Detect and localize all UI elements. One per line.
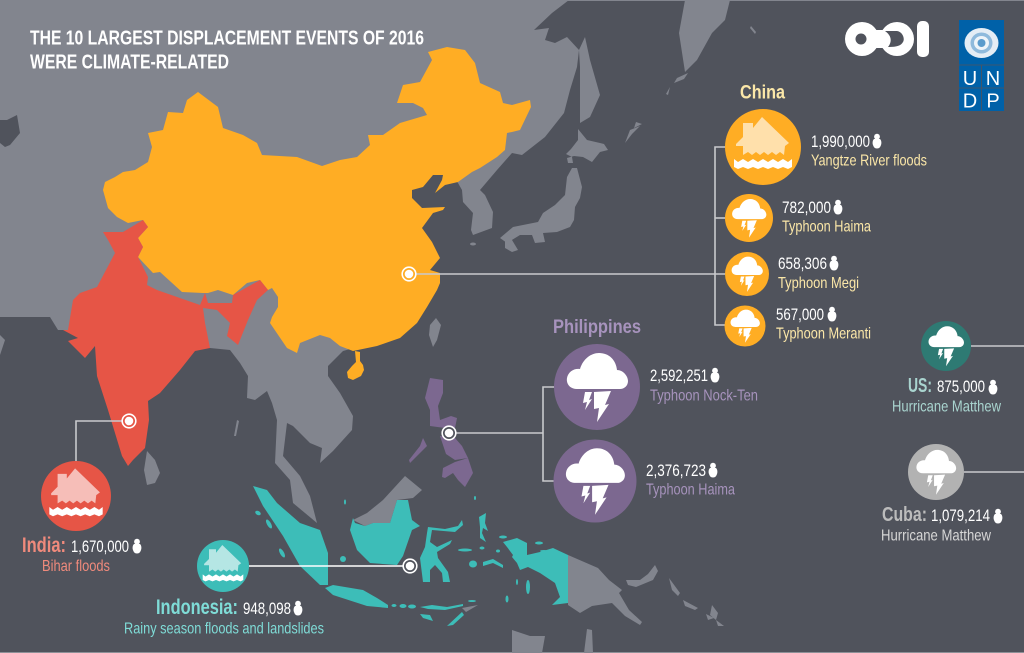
map: India — [63, 220, 268, 466]
icon: flood — [725, 109, 801, 185]
Sulawesi — [420, 520, 463, 582]
Kamchatka — [679, 0, 730, 72]
text: US — [892, 375, 1001, 416]
map: Indonesia — [253, 486, 568, 626]
panel: India — [22, 461, 141, 575]
text: Meranti: Typhoon Meranti — [776, 326, 871, 342]
marker: Philippines — [442, 426, 456, 440]
panel: Indonesia — [124, 540, 324, 638]
text: Indonesia: Indonesia: — [156, 596, 238, 619]
panel: Philippines — [553, 316, 758, 522]
logo: ODI — [845, 21, 929, 57]
text: India: Bihar floods — [42, 558, 110, 575]
text: Nock-Ten: 2,592,251 — [650, 367, 708, 385]
logo: UNDP: U — [963, 68, 977, 90]
Sakhalin — [579, 37, 600, 123]
Timor east — [462, 605, 478, 612]
text: Megi: 658,306 — [778, 255, 827, 273]
text: Nock-Ten — [650, 367, 758, 404]
logo: UNDP: D — [963, 90, 977, 112]
Australia — [584, 629, 593, 653]
icon: storm — [908, 444, 964, 500]
text: US: 875,000 — [937, 378, 985, 396]
text: India — [22, 534, 141, 575]
text: Meranti — [776, 306, 871, 342]
Taiwan — [429, 318, 441, 347]
icon: storm Haima — [554, 440, 636, 522]
marker: India — [122, 414, 136, 428]
panel: China — [724, 82, 927, 346]
text: US: US: — [908, 375, 932, 397]
marker: Indonesia — [403, 559, 417, 573]
Papua — [503, 538, 568, 605]
Hokkaido — [566, 129, 608, 163]
connector lines — [76, 147, 1024, 566]
text: Haima: 2,376,723 — [646, 462, 706, 480]
icon: flood — [41, 461, 111, 531]
logo: UNDP: N — [986, 68, 1000, 90]
marker: China — [402, 267, 416, 281]
text: Haima: 782,000 — [782, 199, 831, 217]
panel: US — [892, 321, 1001, 416]
text: US: Hurricane Matthew — [892, 398, 1001, 416]
icon: storm Haima — [725, 194, 773, 242]
Kyushu — [505, 240, 518, 252]
logo: UNDP: P — [986, 90, 1000, 112]
panel: Cuba — [881, 444, 1002, 544]
logo: UNDP — [959, 20, 1004, 112]
text: Haima — [646, 462, 735, 498]
text: Megi: Typhoon Megi — [778, 275, 859, 292]
text: Haima: Typhoon Haima — [646, 482, 735, 498]
text: Indonesia: Rainy season floods and landslides — [124, 620, 324, 638]
text: Cuba: Cuba: — [882, 504, 927, 526]
text: Indonesia: 948,098 — [243, 600, 291, 618]
Kuril islands — [674, 73, 688, 83]
Caspian Sea — [0, 115, 20, 147]
text: Megi — [778, 255, 859, 292]
title — [30, 26, 424, 74]
text: India: India: — [22, 534, 66, 557]
map: Philippines — [409, 378, 473, 487]
Halmahera — [479, 513, 488, 542]
Honshu — [500, 168, 582, 243]
text: Haima: Typhoon Haima — [782, 218, 871, 236]
text: Cuba — [881, 504, 1002, 544]
map: neighbouring land — [0, 0, 756, 653]
Papua New Guinea — [568, 555, 642, 625]
Sri Lanka — [144, 451, 160, 485]
text: Yangtze: Yangtze River floods — [811, 152, 927, 170]
text: Indonesia — [124, 596, 324, 638]
text: Meranti: 567,000 — [776, 306, 824, 324]
icon: storm Megi — [725, 252, 769, 296]
map: China — [103, 47, 531, 380]
icon: storm — [921, 321, 971, 371]
icon: storm Meranti — [724, 306, 766, 346]
text: Haima — [782, 199, 871, 236]
text: Nock-Ten: Typhoon Nock-Ten — [650, 388, 758, 404]
title: THE 10 LARGEST DISPLACEMENT EVENTS OF 2016 — [30, 26, 424, 50]
New Britain and islands — [626, 565, 658, 587]
Andaman — [234, 420, 239, 436]
Seram and small islands — [483, 559, 503, 568]
title: WERE CLIMATE-RELATED — [30, 50, 229, 74]
icon: storm Nock-Ten — [554, 344, 640, 430]
text: India: 1,670,000 — [71, 538, 129, 556]
text: Cuba: Hurricane Matthew — [881, 528, 991, 544]
text: Yangtze: 1,990,000 — [811, 133, 870, 151]
Jeju — [470, 242, 476, 246]
heading: Philippines: Philippines — [553, 316, 641, 338]
heading: China: China — [740, 82, 785, 104]
text: Cuba: 1,079,214 — [931, 507, 990, 525]
Hainan — [347, 351, 364, 380]
Borneo north — [353, 476, 422, 526]
icon: flood — [197, 540, 249, 592]
text: Yangtze — [811, 133, 927, 170]
